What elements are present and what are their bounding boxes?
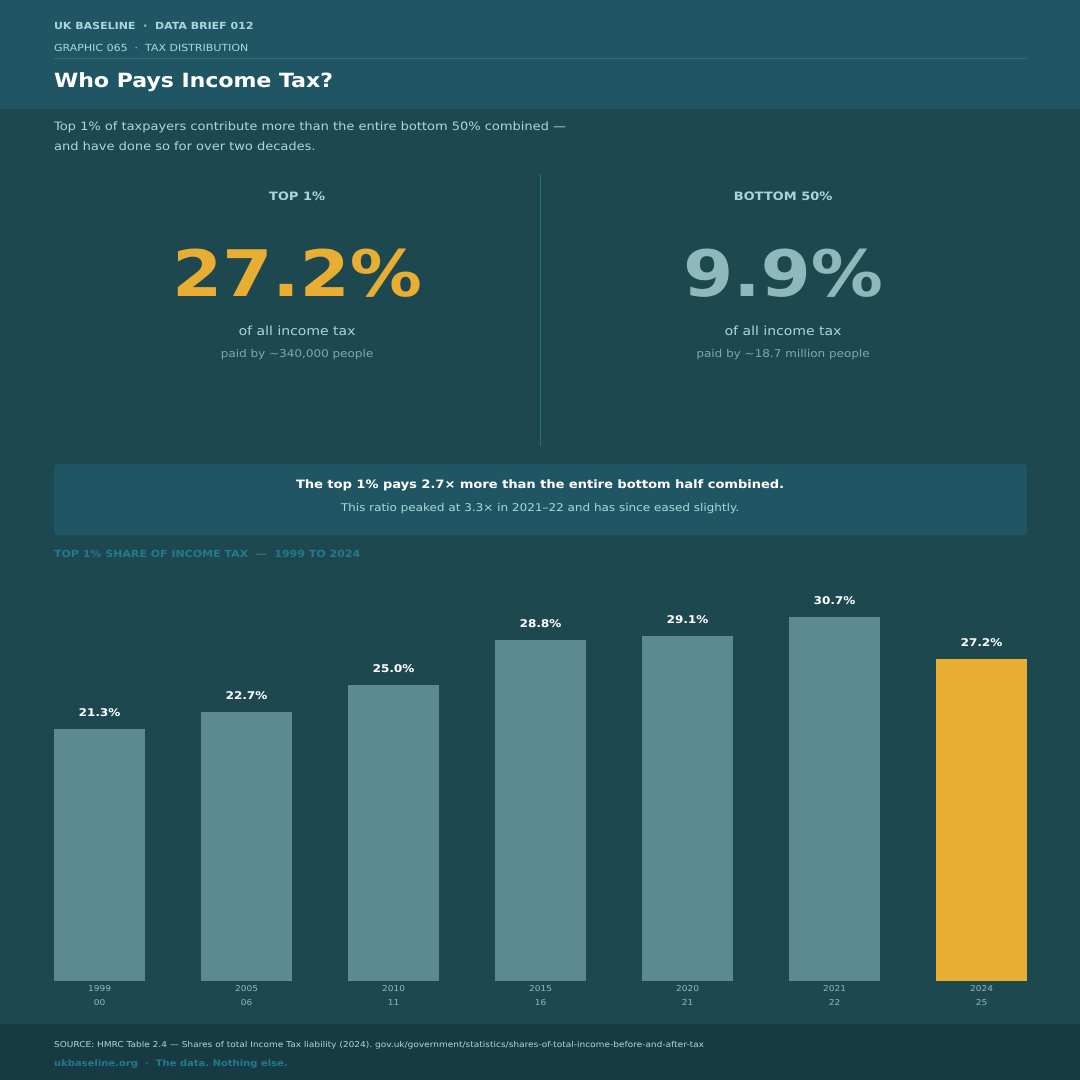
- subtitle: Top 1% of taxpayers contribute more than the entire bottom 50% combined —: [54, 120, 566, 134]
- bar: 1999-00: 21.3%: [79, 706, 120, 719]
- bar: 2024-25 highlighted: [936, 636, 1027, 1008]
- bar: 2024-25 highlighted: 2024: [970, 985, 993, 994]
- bar: 2020-21: 2020: [676, 985, 699, 994]
- bar: 2015-16: 16: [535, 999, 546, 1008]
- source line: SOURCE: HMRC Table 2.4 — Shares of total Income Tax liability (2024). gov.uk/government/statistics/shares-of-total-income-before-and-after-tax: [54, 1041, 704, 1050]
- top 1% people count: paid by ~340,000 people: [221, 347, 373, 360]
- bar: 2010-11: 2010: [382, 985, 405, 994]
- bar: 2020-21: 21: [682, 999, 693, 1008]
- bar: 2015-16: 28.8%: [520, 617, 561, 630]
- subtitle: and have done so for over two decades.: [54, 140, 316, 154]
- bottom 50% figure: 9.9%: [683, 236, 883, 311]
- panel: bottom 50%: [683, 190, 883, 360]
- bar: 2020-21: [642, 613, 733, 1008]
- chart heading: TOP 1% SHARE OF INCOME TAX — 1999 TO 2024: [54, 548, 360, 560]
- title: Who Pays Income Tax?: [54, 70, 333, 92]
- bar: 2010-11: 11: [388, 999, 399, 1008]
- bar: 2021-22: [789, 594, 880, 1008]
- bottom 50% people count: paid by ~18.7 million people: [696, 347, 870, 360]
- bar: 2015-16: 2015: [529, 985, 552, 994]
- callout headline: The top 1% pays 2.7× more than the entire bottom half combined.: [296, 478, 784, 492]
- bar: 2010-11: 25.0%: [373, 662, 414, 675]
- bar: 2024-25 highlighted: 27.2%: [961, 636, 1002, 649]
- bottom 50% caption: of all income tax: [725, 324, 841, 339]
- subtitle: [54, 120, 566, 154]
- bar: 1999-00: 1999: [88, 985, 111, 994]
- bar: 2021-22: 22: [829, 999, 840, 1008]
- bottom 50% label: BOTTOM 50%: [734, 190, 832, 204]
- bar: 2021-22: 30.7%: [814, 594, 855, 607]
- top 1% figure: 27.2%: [172, 236, 422, 311]
- footer brand line: ukbaseline.org · The data. Nothing else.: [54, 1059, 288, 1069]
- header band: [0, 0, 1080, 109]
- callout detail: This ratio peaked at 3.3× in 2021–22 and has since eased slightly.: [341, 501, 739, 514]
- footer: [0, 1024, 1080, 1080]
- top 1% label: TOP 1%: [269, 190, 325, 204]
- bar: 1999-00: [54, 706, 145, 1008]
- bar: 2024-25 highlighted: 25: [976, 999, 987, 1008]
- bar: 2021-22: 2021: [823, 985, 846, 994]
- bar: 2010-11: [348, 662, 439, 1008]
- eyebrow: brand and brief number: UK BASELINE · DATA BRIEF 012: [54, 20, 254, 32]
- bar: 1999-00: 00: [94, 999, 105, 1008]
- bar: 2005-06: 22.7%: [226, 689, 267, 702]
- bar: 2015-16: [495, 617, 586, 1008]
- panel: top 1%: [172, 190, 422, 360]
- bar: 2005-06: 2005: [235, 985, 258, 994]
- graphic reference line: GRAPHIC 065 · TAX DISTRIBUTION: [54, 42, 248, 54]
- callout: [54, 464, 1027, 535]
- bar: 2005-06: 06: [241, 999, 252, 1008]
- bar chart: [54, 594, 1027, 1008]
- top 1% caption: of all income tax: [239, 324, 355, 339]
- bar: 2020-21: 29.1%: [667, 613, 708, 626]
- bar: 2005-06: [201, 689, 292, 1008]
